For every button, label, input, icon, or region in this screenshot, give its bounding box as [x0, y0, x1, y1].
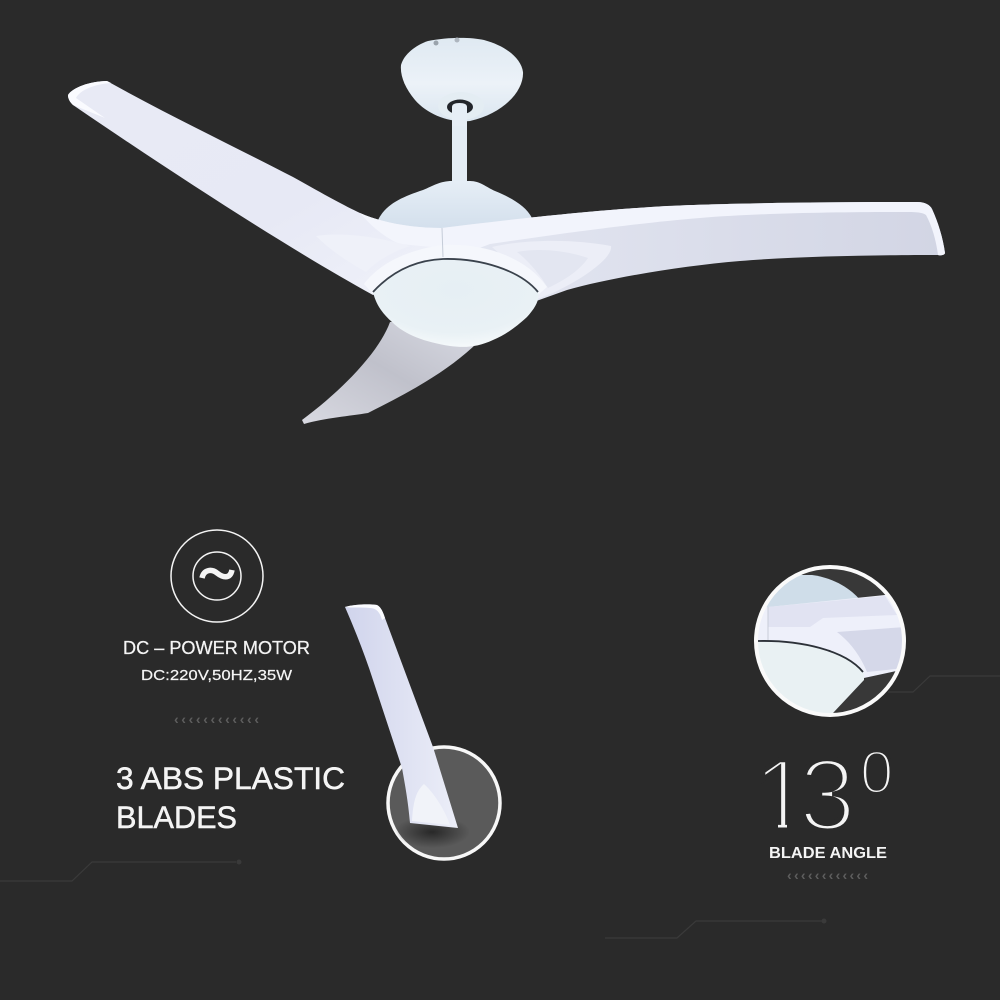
zoomed bowl [758, 642, 864, 713]
zoomed blade band [758, 595, 901, 678]
chevron divider left: ‹‹‹‹‹‹‹‹‹‹‹‹ [174, 711, 259, 727]
heading: 3 ABS plastic blades [116, 760, 345, 835]
blade detail circle [345, 604, 500, 859]
hub band [364, 245, 547, 302]
light bowl [373, 259, 538, 347]
spec text: DC:220V,50HZ,35W [141, 667, 293, 684]
blade side view [345, 604, 458, 828]
zoomed blade upper panel [768, 596, 897, 627]
bowl rim line [373, 259, 538, 292]
zoomed dome [766, 575, 858, 607]
circuit line: lower left [0, 860, 242, 881]
heading: 3 ABS plastic blades: 3 ABS PLASTIC [116, 760, 345, 796]
blade angle value: 3 [799, 738, 856, 852]
motor housing dome [378, 181, 532, 240]
blade angle label: BLADE ANGLE [769, 845, 887, 862]
lower blade [302, 320, 478, 424]
heading: 3 ABS plastic blades: BLADES [116, 799, 237, 835]
down rod [452, 105, 467, 185]
blade angle value: 0 [860, 739, 893, 806]
right blade [442, 202, 945, 304]
zoomed blade face [837, 627, 905, 672]
circuit line: right [888, 676, 1000, 692]
ceiling fan [68, 38, 945, 424]
chevron divider right: ‹‹‹‹‹‹‹‹‹‹‹‹ [787, 867, 868, 883]
blade angle value [765, 752, 890, 828]
circuit line: bottom centre [605, 918, 826, 938]
icon: DC motor [171, 530, 263, 622]
heading: DC power motor: DC – POWER MOTOR [123, 638, 310, 658]
blade angle value: 1 [753, 738, 810, 852]
left blade [68, 81, 443, 295]
hub detail circle [750, 566, 910, 716]
canopy [401, 38, 523, 126]
